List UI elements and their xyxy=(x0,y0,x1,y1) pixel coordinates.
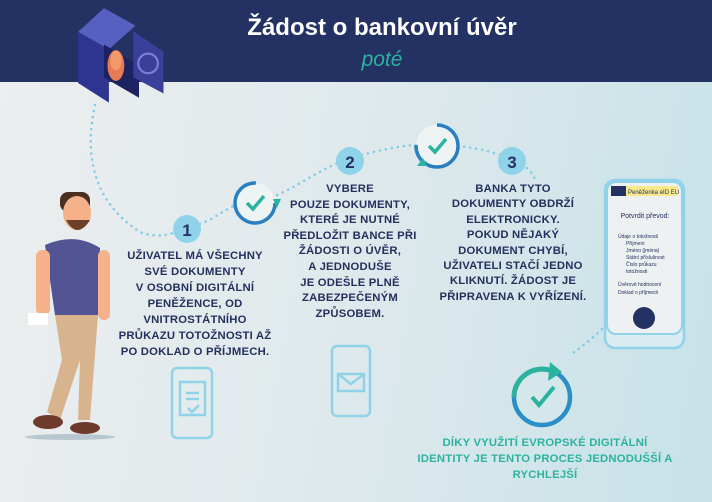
text: step 1: PRŮKAZU TOTOŽNOSTI AŽ xyxy=(119,330,271,342)
step 2 number xyxy=(336,147,364,175)
icon: phone envelope xyxy=(332,346,370,416)
phone mockup: totožnosti xyxy=(626,269,647,275)
text: step 1: V OSOBNÍ DIGITÁLNÍ xyxy=(136,282,254,294)
step 3 number: 3 xyxy=(507,153,517,172)
bottom callout: RYCHLEJŠÍ xyxy=(513,469,577,481)
text: step 3: UŽIVATELI STAČÍ JEDNO xyxy=(443,260,583,272)
text: step 2: ŽÁDOSTI O ÚVĚR, xyxy=(299,245,401,257)
header bar xyxy=(0,0,712,82)
step 1 number: 1 xyxy=(182,221,192,240)
phone mockup: Příjmení xyxy=(626,241,645,247)
bottom callout: IDENTITY JE TENTO PROCES JEDNODUŠŠÍ A xyxy=(417,453,673,465)
phone mockup: Úvěrové hodnocení xyxy=(618,281,662,288)
title: Žádost o bankovní úvěr xyxy=(247,14,517,41)
text: step 3: ELEKTRONICKY. xyxy=(466,214,560,226)
dotted path xyxy=(91,105,628,355)
bottom callout: DÍKY VYUŽITÍ EVROPSKÉ DIGITÁLNÍ xyxy=(443,437,647,449)
text: step 2: JE ODEŠLE PLNĚ xyxy=(300,277,400,289)
person xyxy=(25,192,115,440)
phone mockup: Doklad o příjmech xyxy=(618,290,659,296)
text: step 1: PENĚŽENCE, OD xyxy=(148,298,242,310)
subtitle: poté xyxy=(362,48,402,71)
phone mockup: Potvrdit převod: xyxy=(620,213,670,220)
phone mockup: Údaje o totožnosti xyxy=(618,233,658,240)
icon: big clock xyxy=(514,362,570,425)
text: step 3: POKUD NĚJAKÝ xyxy=(467,229,559,241)
phone mockup: Státní příslušnost xyxy=(626,255,665,261)
text: step 1: SVÉ DOKUMENTY xyxy=(144,266,246,278)
icon: safe xyxy=(78,8,164,103)
text: step 3 xyxy=(440,183,586,303)
icon: clock 2 xyxy=(416,125,458,167)
text: step 1: UŽIVATEL MÁ VŠECHNY xyxy=(127,250,263,262)
step 1 number xyxy=(173,215,201,243)
phone mockup: Číslo průkazu xyxy=(626,261,657,268)
text: step 3: KLIKNUTÍ. ŽÁDOST JE xyxy=(450,275,576,287)
text: step 3: PŘIPRAVENA K VYŘÍZENÍ. xyxy=(440,291,586,303)
phone mockup xyxy=(605,180,684,348)
phone mockup: Peněženka eID EU xyxy=(628,190,679,196)
step 2 number: 2 xyxy=(345,153,355,172)
text: step 1: PO DOKLAD O PŘÍJMECH. xyxy=(121,346,269,358)
text: step 2: POUZE DOKUMENTY, xyxy=(290,199,410,211)
text: step 1: VNITROSTÁTNÍHO xyxy=(143,314,247,326)
text: step 2: KTERÉ JE NUTNÉ xyxy=(300,214,400,226)
text: step 2: ZABEZPEČENÝM xyxy=(302,292,398,304)
text: step 2: A JEDNODUŠE xyxy=(308,261,392,273)
icon: phone document xyxy=(172,368,212,438)
text: step 3: BANKA TYTO xyxy=(475,183,551,195)
text: step 2 xyxy=(283,183,417,320)
step 3 number xyxy=(498,147,526,175)
icon: clock 1 xyxy=(235,183,281,223)
text: step 2: PŘEDLOŽIT BANCE PŘI xyxy=(283,230,417,242)
phone mockup: Jméno (jména) xyxy=(626,248,660,254)
bottom callout xyxy=(417,436,673,481)
text: step 1 xyxy=(119,249,271,358)
text: step 2: ZPŮSOBEM. xyxy=(316,308,384,320)
text: step 2: VYBERE xyxy=(326,183,374,195)
text: step 3: DOKUMENTY OBDRŽÍ xyxy=(452,198,574,210)
text: step 3: DOKUMENT CHYBÍ, xyxy=(458,245,568,257)
